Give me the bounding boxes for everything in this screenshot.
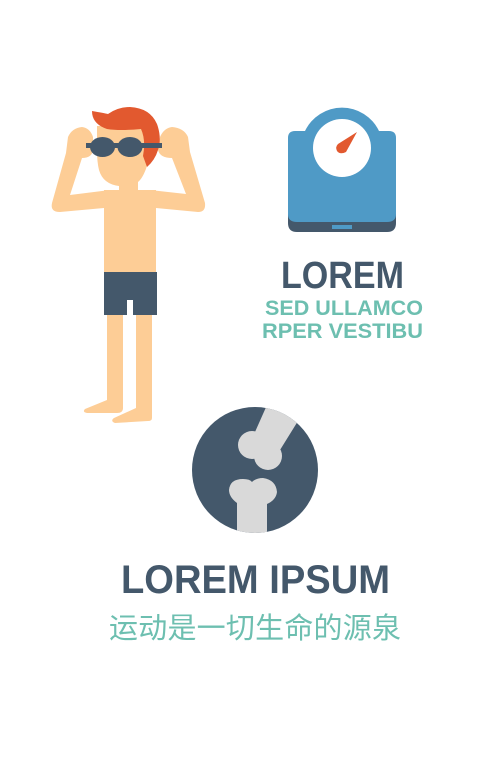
joint circle <box>192 407 318 533</box>
dial <box>313 119 371 177</box>
icon: weighing scale <box>288 108 396 232</box>
title: LOREM IPSUM <box>121 558 390 602</box>
heading: LOREM: LOREM <box>281 255 404 297</box>
subheading line 2: RPER VESTIBU <box>262 320 423 343</box>
bones <box>229 405 298 540</box>
torso <box>104 190 156 274</box>
needle <box>336 132 357 153</box>
scale body <box>288 108 396 222</box>
neck and head <box>97 126 150 192</box>
legs and feet <box>84 312 152 423</box>
goggles <box>86 137 162 157</box>
slot <box>332 225 352 229</box>
figure: man with goggles <box>52 107 205 423</box>
hair <box>92 107 160 167</box>
subtitle: 运动是一切生命的源泉 <box>109 612 401 645</box>
subheading line 1: SED ULLAMCO <box>265 297 423 320</box>
shorts <box>104 272 157 315</box>
scale base <box>288 210 396 232</box>
arms <box>52 127 205 212</box>
icon: knee joint bones <box>192 405 318 540</box>
